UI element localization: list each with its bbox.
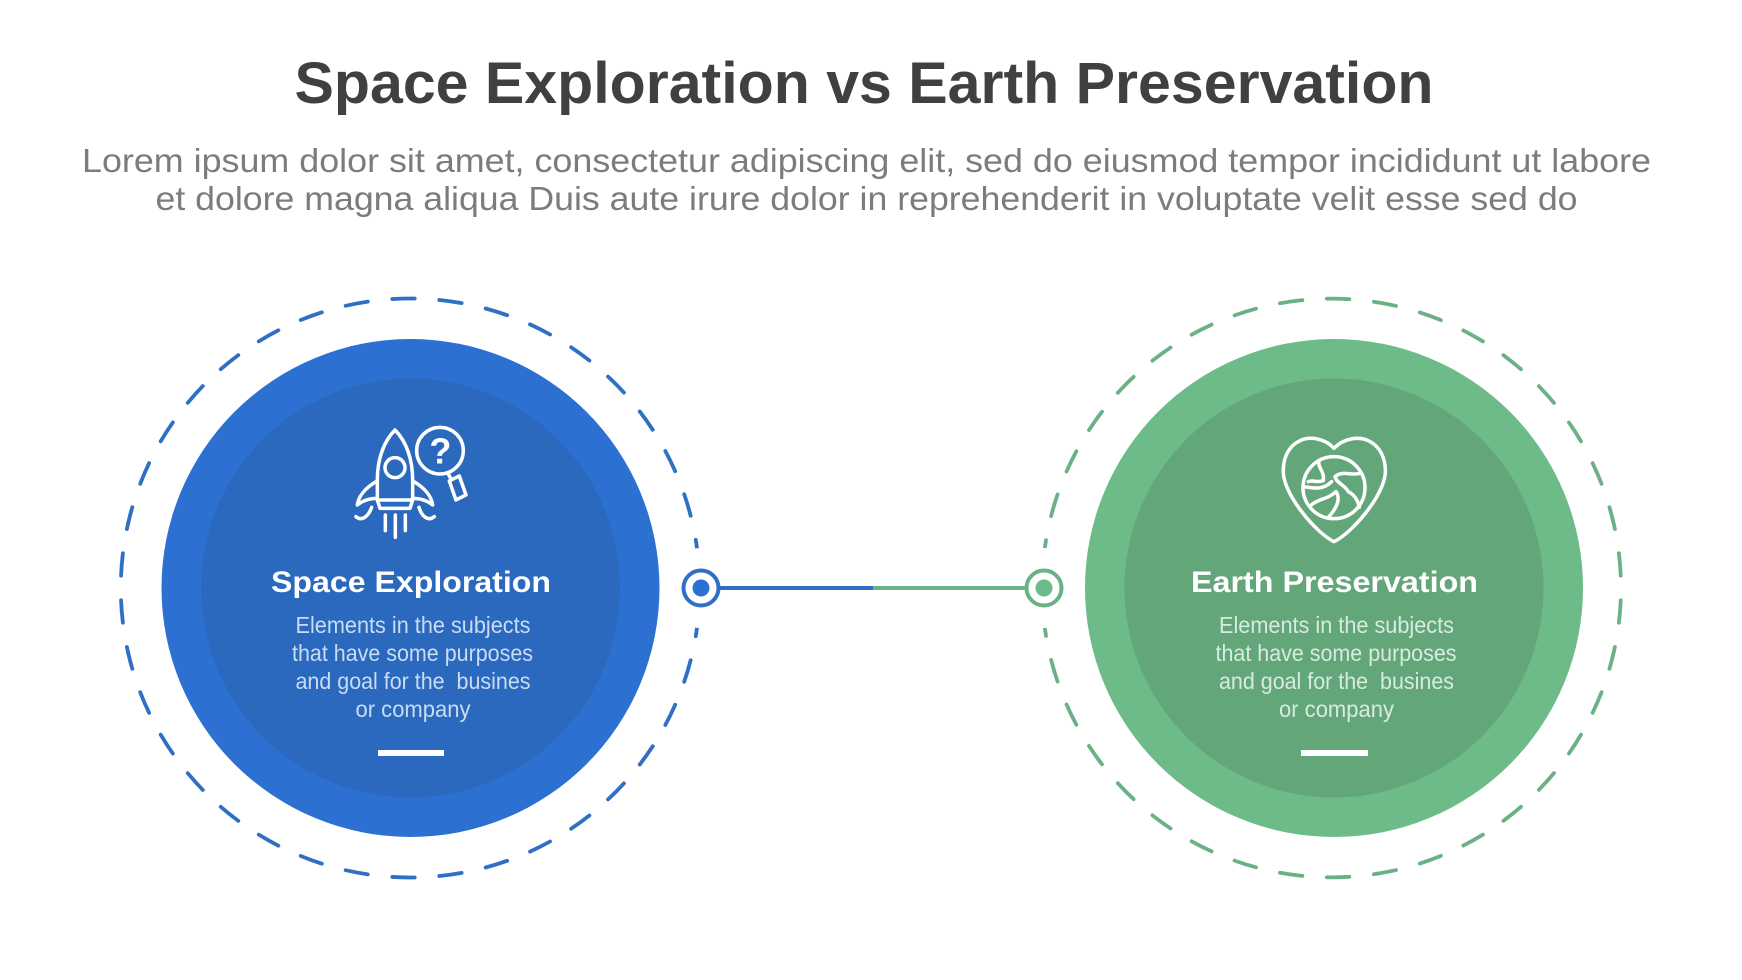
icon: rocket and magnifier <box>356 427 466 537</box>
body text: earth preservation <box>1216 612 1456 722</box>
node: green <box>1026 570 1062 606</box>
body text: earth preservation: that have some purposes <box>1216 640 1456 666</box>
body text: space exploration <box>292 612 533 722</box>
subtitle text block: Lorem ipsum dolor sit amet, consectetur adipiscing elit, sed do eiusmod tempor incididunt ut labore <box>82 142 1651 179</box>
dashed ring: earth preservation <box>1042 299 1621 877</box>
subtitle text block <box>82 142 1651 217</box>
body text: earth preservation: Elements in the subjects <box>1219 612 1454 638</box>
accent bar <box>1301 750 1368 756</box>
icon: heart with globe <box>1283 438 1385 542</box>
body text: earth preservation: or company <box>1279 696 1394 722</box>
heading: space exploration: Space Exploration <box>271 566 551 599</box>
dashed ring: space exploration <box>121 298 700 878</box>
panel: space exploration <box>162 339 660 837</box>
panel: earth preservation <box>1085 339 1583 837</box>
body text: space exploration: Elements in the subjects <box>296 612 530 638</box>
body text: space exploration: or company <box>356 696 471 722</box>
node: blue <box>684 570 718 606</box>
body text: space exploration: that have some purposes <box>292 640 533 666</box>
accent bar <box>378 750 444 756</box>
subtitle text block: et dolore magna aliqua Duis aute irure dolor in reprehenderit in voluptate velit esse sed do <box>156 180 1578 217</box>
title: Space Exploration vs Earth Preservation <box>294 51 1434 116</box>
body text: earth preservation: and goal for the busines <box>1219 668 1454 694</box>
heading: earth preservation: Earth Preservation <box>1191 566 1478 599</box>
icon: rocket and magnifier: ? <box>429 431 451 472</box>
connector: gap halos, line and nodes <box>661 548 1084 628</box>
body text: space exploration: and goal for the busines <box>296 668 530 694</box>
